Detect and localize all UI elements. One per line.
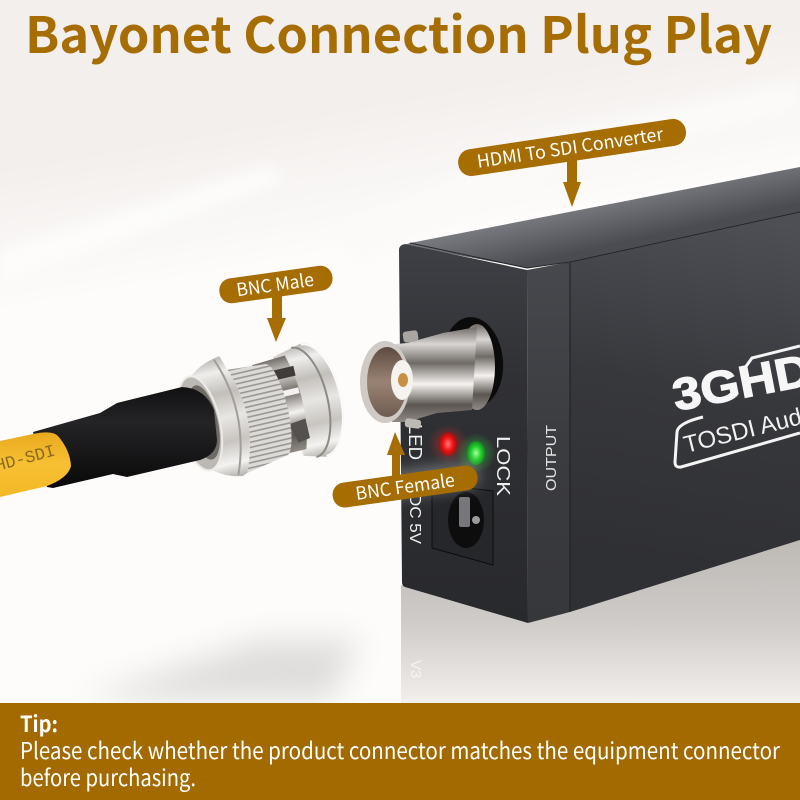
black sleeve: [33, 387, 217, 488]
bayonet shell: [252, 354, 313, 457]
bnc female connector: [360, 315, 507, 429]
arrow: [267, 296, 286, 342]
box front face: [399, 244, 528, 623]
logo frame: [675, 346, 800, 467]
label: bnc male: BNC Male: [235, 266, 315, 302]
arrow: [387, 432, 405, 478]
label: bnc female: BNC Female: [354, 466, 456, 506]
label: hdmi to sdi converter: [456, 117, 688, 207]
label: hdmi to sdi converter: HDMI To SDI Converter: [475, 120, 666, 174]
tip body: before purchasing.: [20, 759, 196, 793]
box band: [527, 262, 570, 623]
lock label: LOCK: [493, 436, 513, 496]
red led: [428, 424, 468, 464]
power jack: [432, 484, 493, 565]
logo heading: 3GHD: [668, 344, 800, 421]
logo: [668, 344, 800, 467]
led label: LED: [405, 424, 425, 460]
box side panel: [570, 212, 800, 612]
arrow: [563, 155, 581, 207]
front ring: [271, 337, 354, 463]
rear collar: [168, 353, 260, 487]
dc label: DC 5V: [406, 494, 423, 544]
coaxial cable: [0, 332, 354, 497]
label: bnc female: [331, 432, 481, 509]
knurled collar: [224, 359, 300, 473]
box top face: [404, 167, 800, 268]
product reflection: V3: [407, 660, 424, 678]
tip heading: Tip:: [20, 707, 58, 739]
output label: OUTPUT: [543, 425, 560, 491]
tip panel: [0, 703, 800, 800]
product reflection: [401, 540, 800, 703]
male connector: [167, 332, 354, 487]
label: bnc male: [218, 264, 334, 342]
converter box: [399, 167, 800, 623]
green led: [456, 433, 496, 473]
yellow cable: [0, 432, 71, 497]
edge highlights: [410, 212, 800, 268]
